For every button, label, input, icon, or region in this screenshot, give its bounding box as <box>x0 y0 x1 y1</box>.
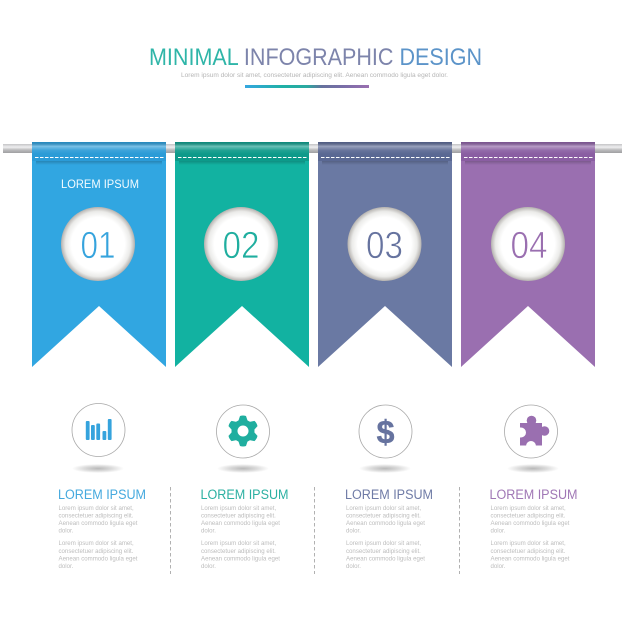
body text: Aenean commodo ligula eget <box>490 556 570 562</box>
number badge 04 <box>491 207 565 281</box>
body text: Lorem ipsum dolor sit amet, <box>201 540 276 547</box>
heading: LOREM IPSUM <box>200 487 288 502</box>
body text: consectetuer adipiscing elit. <box>346 512 421 520</box>
body text: dolor. <box>346 528 361 534</box>
number badge 01 <box>61 207 135 281</box>
icon: gear <box>216 405 270 458</box>
body text: dolor. <box>346 563 361 570</box>
icon shadow 3 <box>359 464 411 473</box>
body text <box>490 505 570 570</box>
body text: consectetuer adipiscing elit. <box>58 548 134 555</box>
number badge 03: 03 <box>366 225 403 267</box>
column 4 text <box>490 487 578 570</box>
body text: Lorem ipsum dolor sit amet, <box>346 540 421 547</box>
body text: dolor. <box>58 528 74 534</box>
body text: Lorem ipsum dolor sit amet, <box>201 505 276 512</box>
number badge 02: 02 <box>222 225 260 267</box>
banner 4 <box>461 142 595 367</box>
body text: Lorem ipsum dolor sit amet, <box>490 505 566 512</box>
banner label: LOREM IPSUM <box>61 179 139 191</box>
body text: consectetuer adipiscing elit. <box>346 548 421 555</box>
icon shadow 1 <box>72 464 124 473</box>
body text: Lorem ipsum dolor sit amet, <box>346 505 421 512</box>
body text: consectetuer adipiscing elit. <box>58 512 134 520</box>
banner 2 <box>175 142 309 367</box>
body text: dolor. <box>490 528 506 534</box>
body text: Aenean commodo ligula eget <box>201 520 280 527</box>
heading: LOREM IPSUM <box>58 487 146 502</box>
body text: consectetuer adipiscing elit. <box>490 548 566 555</box>
body text: Aenean commodo ligula eget <box>346 520 425 527</box>
banner 1 <box>32 142 166 367</box>
body text: dolor. <box>58 563 74 570</box>
body text <box>58 505 138 570</box>
body text: consectetuer adipiscing elit. <box>201 512 276 520</box>
heading: LOREM IPSUM <box>490 487 578 502</box>
body text: Aenean commodo ligula eget <box>58 520 138 527</box>
body text: consectetuer adipiscing elit. <box>201 548 276 555</box>
body text: Lorem ipsum dolor sit amet, <box>58 505 134 512</box>
title underline <box>245 85 369 88</box>
icon: dollar sign: $ <box>377 414 395 450</box>
icon shadow 2 <box>217 464 269 473</box>
number badge 04: 04 <box>510 225 548 267</box>
body text: Aenean commodo ligula eget <box>58 556 138 562</box>
number badge 01: 01 <box>80 225 116 267</box>
icon: puzzle piece <box>504 405 558 458</box>
title: MINIMAL INFOGRAPHIC DESIGN <box>149 44 482 71</box>
icon: bar chart <box>72 404 125 456</box>
subtitle: Lorem ipsum dolor sit amet, consectetuer adipiscing elit. Aenean commodo ligula eget dolor. <box>181 72 448 79</box>
column 2 text <box>200 487 288 570</box>
icon: dollar sign <box>359 405 412 458</box>
number badge 03 <box>348 207 422 281</box>
body text: Lorem ipsum dolor sit amet, <box>490 540 566 547</box>
column 1 text <box>58 487 146 570</box>
banner 3 <box>318 142 452 367</box>
number badge 02 <box>204 207 278 281</box>
body text: Aenean commodo ligula eget <box>346 556 425 562</box>
body text: Aenean commodo ligula eget <box>490 520 570 527</box>
hanging rod <box>3 144 622 153</box>
body text: consectetuer adipiscing elit. <box>490 512 566 520</box>
icon shadow 4 <box>507 464 559 473</box>
body text: Aenean commodo ligula eget <box>201 556 280 562</box>
body text: dolor. <box>201 563 216 570</box>
body text <box>346 505 425 570</box>
column 3 text <box>345 487 433 570</box>
body text: Lorem ipsum dolor sit amet, <box>58 540 134 547</box>
heading: LOREM IPSUM <box>345 487 433 502</box>
body text: dolor. <box>201 528 216 534</box>
body text <box>201 505 280 570</box>
body text: dolor. <box>490 563 506 570</box>
